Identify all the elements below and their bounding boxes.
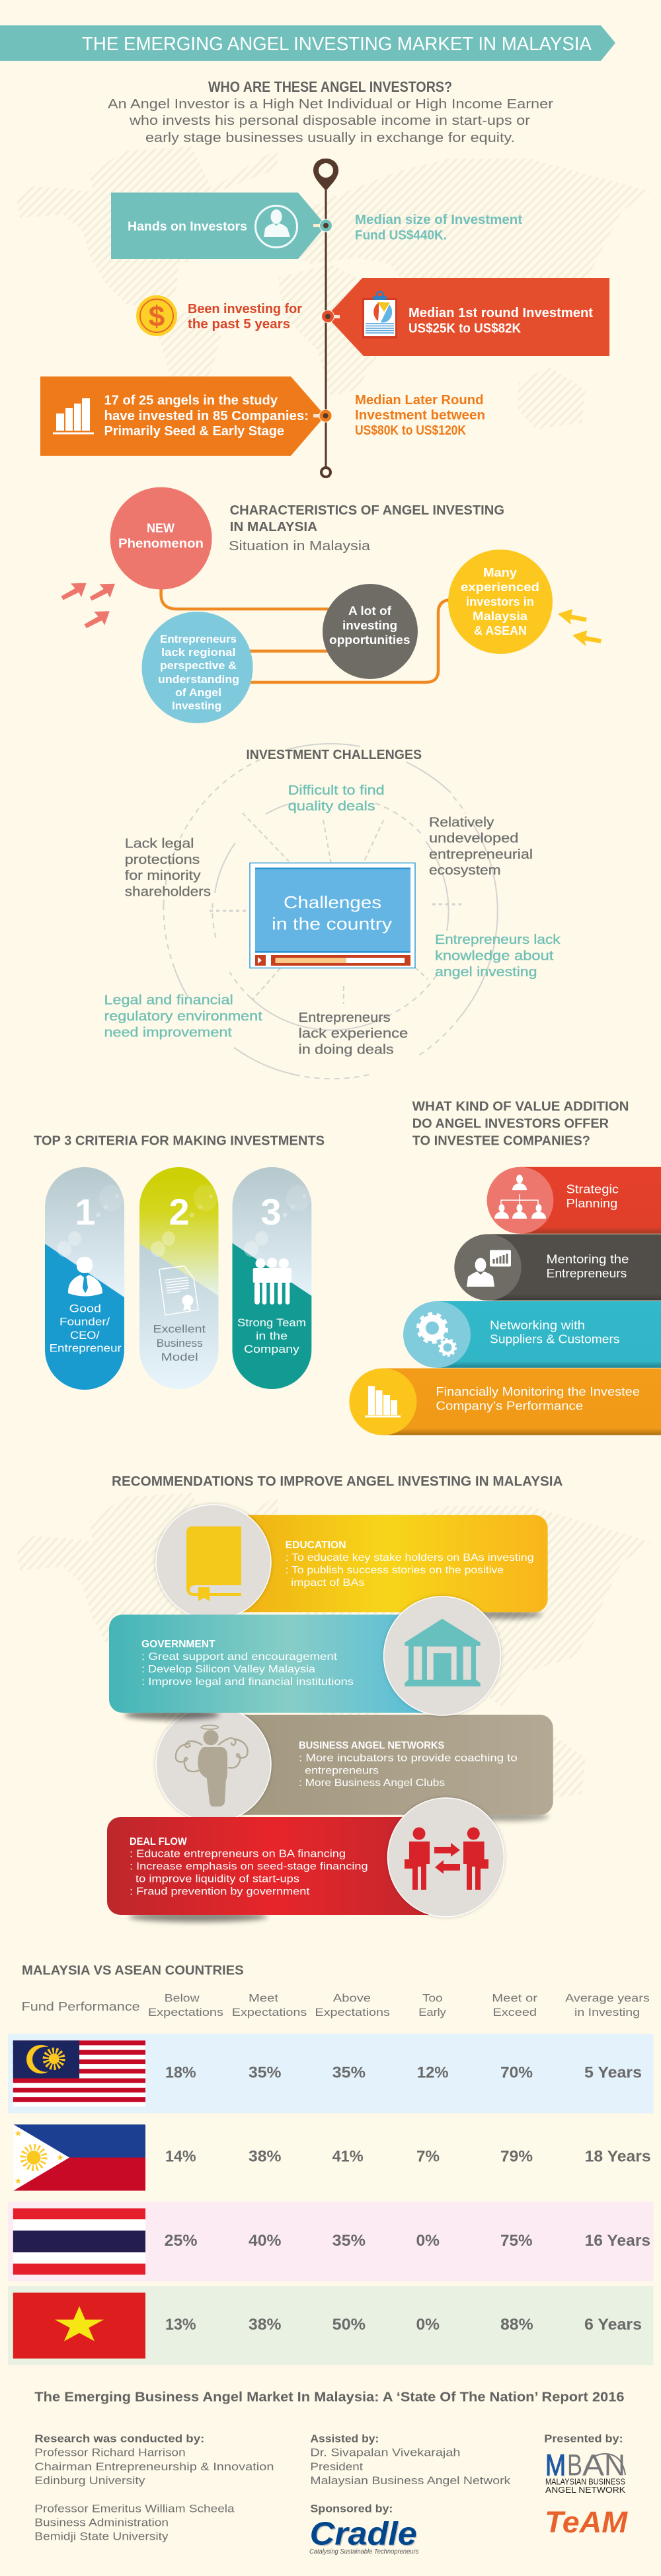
circle: many experienced investors: investors in <box>466 595 534 608</box>
challenge: undeveloped entrepreneurial ecosystem: Relatively <box>429 815 494 830</box>
pill 1: good founder <box>45 1167 124 1390</box>
row: philippines: 41% <box>332 2148 364 2166</box>
text: median later round: US$80K to US$120K <box>355 423 466 438</box>
text: been investing for 5 years <box>188 302 302 332</box>
circle: many experienced investors <box>448 550 553 654</box>
footer: presented by logos <box>544 2432 629 2539</box>
circle: new phenomenon: Phenomenon <box>118 537 204 551</box>
challenge: lack legal protections: for minority <box>125 869 201 883</box>
row: vietnam: 38% <box>249 2316 281 2334</box>
challenge: lack legal protections: Lack legal <box>125 837 194 851</box>
text: median later round: Investment between <box>355 408 485 423</box>
row: malaysia: 35% <box>332 2064 366 2082</box>
investment challenges rings <box>163 744 498 1079</box>
recommendation: education: : To publish success stories on the positive <box>286 1565 504 1576</box>
table header: Expectations <box>232 2006 307 2019</box>
cylinder: strategic planning: Planning <box>566 1197 617 1210</box>
footer: research credits: Research was conducted by: <box>34 2432 204 2445</box>
row: vietnam: 0% <box>416 2316 440 2334</box>
challenge: entrepreneurs lack experience: Entrepreneurs <box>299 1011 391 1025</box>
row: vietnam: 6 Years <box>584 2316 642 2334</box>
circle: entrepreneurs lack regional perspective: Investing <box>172 699 221 712</box>
pill 3: strong team: 3 <box>260 1191 282 1233</box>
footer: sponsored by cradle: Cradle <box>310 2517 417 2552</box>
recommendation: business angel networks <box>156 1707 553 1822</box>
cylinder: strategic planning: Strategic <box>566 1183 619 1196</box>
title banner: THE EMERGING ANGEL INVESTING MARKET IN MALAYSIA <box>82 34 592 55</box>
video screen: challenges in the country: in the country <box>272 914 392 934</box>
pill 2: excellent business model <box>139 1167 218 1389</box>
icon: investor avatar <box>255 206 297 247</box>
text: been investing for 5 years: the past 5 years <box>188 317 290 332</box>
panel: 17 of 25 angels: 17 of 25 angels in the study <box>104 394 278 408</box>
row: vietnam: 88% <box>500 2316 533 2334</box>
pill 3: strong team <box>232 1167 311 1389</box>
footer: research credits: Professor Richard Harrison <box>34 2447 186 2459</box>
circle: many experienced investors: experienced <box>461 581 539 594</box>
row: malaysia: 5 Years <box>584 2064 642 2082</box>
recommendation: business angel networks: BUSINESS ANGEL NETWORKS <box>299 1740 445 1752</box>
table header: Meet <box>249 1991 278 2004</box>
panel: 17 of 25 angels: Primarily Seed & Early Stage <box>104 424 284 439</box>
recommendation: business angel networks: entrepreneurs <box>305 1766 379 1777</box>
arrows: pink pointing up right <box>61 583 115 628</box>
row: malaysia: 12% <box>417 2064 449 2082</box>
intro: who are these angel investors: early stage businesses usually in exchange for equity. <box>145 131 515 145</box>
intro: who are these angel investors: who invests his personal disposable income in start-ups or <box>129 114 530 128</box>
pill 3: strong team: Company <box>244 1343 299 1355</box>
recommendation: education: EDUCATION <box>286 1540 346 1551</box>
icon: bar chart <box>53 398 94 435</box>
pill 3: strong team: Strong Team <box>237 1316 306 1329</box>
recommendation: business angel networks: : More incubators to provide coaching to <box>299 1752 518 1764</box>
icon: gears <box>418 1314 456 1355</box>
heading: recommendations: RECOMMENDATIONS TO IMPROVE ANGEL INVESTING IN MALAYSIA <box>112 1474 563 1489</box>
circle: many experienced investors: Malaysia <box>473 610 528 623</box>
row: philippines: 18 Years <box>585 2148 651 2166</box>
video screen: challenges in the country: Challenges <box>284 892 381 912</box>
heading: value addition: TO INVESTEE COMPANIES? <box>412 1133 590 1148</box>
pill 1: good founder: CEO/ <box>70 1329 100 1342</box>
cylinder: mentoring the entrepreneurs: Entrepreneurs <box>546 1267 627 1280</box>
recommendation: education <box>156 1505 548 1620</box>
challenge: entrepreneurs lack knowledge: Entrepreneurs lack <box>435 933 561 947</box>
footer: research credits: Business Administration <box>34 2516 169 2528</box>
recommendation: deal flow: : Fraud prevention by government <box>130 1886 310 1898</box>
icon: clipboard with pie chart <box>362 292 397 338</box>
circle: a lot of investing opportunities: investing <box>342 619 397 632</box>
row: philippines: 79% <box>500 2148 533 2166</box>
footer: sponsored by cradle: Catalysing Sustainable Technopreneurs <box>309 2548 418 2556</box>
table header: Average years <box>565 1991 650 2004</box>
footer: presented by logos: N <box>604 2448 625 2482</box>
flag: malaysia <box>13 2040 145 2106</box>
panel: hands on investors <box>111 193 332 259</box>
heading: characteristics of angel investing: CHARACTERISTICS OF ANGEL INVESTING <box>230 503 504 518</box>
circle: new phenomenon: NEW <box>147 522 175 536</box>
challenge: undeveloped entrepreneurial ecosystem: entrepreneurial <box>429 847 533 862</box>
circle: a lot of investing opportunities: A lot of <box>348 604 392 618</box>
footer: research credits: Edinburg University <box>34 2474 145 2487</box>
circle: entrepreneurs lack regional perspective: understanding <box>158 673 239 686</box>
table header: Meet or <box>492 1991 537 2004</box>
recommendation: deal flow: to improve liquidity of start-ups <box>136 1873 299 1885</box>
icon: book <box>186 1526 241 1601</box>
footer: report title: The Emerging Business Angel Market In Malaysia: A ‘State Of The Nation’ Report 2016 <box>34 2390 624 2405</box>
cylinder: financially monitoring <box>349 1369 661 1435</box>
intro: who are these angel investors: WHO ARE THESE ANGEL INVESTORS? <box>208 79 452 95</box>
pill 1: good founder: 1 <box>75 1191 96 1233</box>
circle: entrepreneurs lack regional perspective <box>141 612 253 723</box>
recommendation: education: : To educate key stake holders on BAs investing <box>286 1552 534 1563</box>
recommendation: deal flow <box>107 1798 504 1922</box>
recommendation: government <box>109 1596 501 1720</box>
icon: org chart <box>494 1174 546 1219</box>
icon: descending bars <box>365 1386 401 1417</box>
row: thailand: 75% <box>500 2232 533 2250</box>
title banner <box>0 25 615 61</box>
row: vietnam <box>8 2286 653 2365</box>
table header: Expectations <box>315 2006 390 2019</box>
circle: new phenomenon <box>110 487 212 589</box>
table header <box>21 1991 650 2019</box>
challenge: legal and financial regulatory environment: regulatory environment <box>104 1009 262 1024</box>
challenge: undeveloped entrepreneurial ecosystem: ecosystem <box>429 863 501 878</box>
row: malaysia: 35% <box>249 2064 281 2082</box>
table header: Early <box>418 2006 446 2019</box>
recommendation: government: : Develop Silicon Valley Malaysia <box>141 1664 315 1675</box>
footer: research credits: Bemidji State University <box>34 2530 169 2543</box>
text: median later round <box>355 393 485 438</box>
cylinder: financially monitoring: Company's Performance <box>436 1399 583 1412</box>
icon: dollar coin <box>136 295 177 336</box>
intro: who are these angel investors: An Angel Investor is a High Net Individual or High Income Earner <box>108 97 553 112</box>
recommendation: government: : Improve legal and financial institutions <box>141 1676 354 1688</box>
footer: presented by logos: A <box>582 2448 604 2482</box>
footer: research credits: Chairman Entrepreneurship & Innovation <box>34 2460 274 2473</box>
icon: angel <box>176 1725 248 1807</box>
row: vietnam: 50% <box>332 2316 366 2334</box>
flag: vietnam <box>13 2293 145 2359</box>
circle: entrepreneurs lack regional perspective: lack regional <box>161 646 235 659</box>
cylinder: networking <box>403 1301 661 1368</box>
heading: investment challenges: INVESTMENT CHALLENGES <box>246 748 422 762</box>
text: median later round: Median Later Round <box>355 393 484 408</box>
row: philippines: 7% <box>416 2148 440 2166</box>
icon: dollar coin: $ <box>149 301 165 333</box>
heading: value addition: DO ANGEL INVESTORS OFFER <box>412 1116 609 1131</box>
circle: a lot of investing opportunities: opportunities <box>329 633 410 647</box>
row: philippines <box>8 2118 653 2198</box>
row: philippines: 38% <box>249 2148 281 2166</box>
cylinder: mentoring the entrepreneurs <box>454 1234 661 1301</box>
row: thailand: 35% <box>332 2232 366 2250</box>
heading: value addition: WHAT KIND OF VALUE ADDITION <box>412 1100 629 1114</box>
table header: Exceed <box>493 2006 537 2019</box>
challenge: legal and financial regulatory environment: need improvement <box>104 1025 232 1040</box>
recommendation: deal flow: : Increase emphasis on seed-stage financing <box>130 1861 368 1873</box>
row: thailand: 40% <box>249 2232 281 2250</box>
footer: sponsored by cradle <box>309 2502 418 2556</box>
challenge: entrepreneurs lack knowledge: angel investing <box>435 965 537 980</box>
panel: hands on investors: Hands on Investors <box>128 220 247 234</box>
panel: median first round investment <box>321 278 609 356</box>
panel: 17 of 25 angels <box>40 376 332 456</box>
pill 2: excellent business model: Business <box>157 1337 203 1349</box>
footer: assisted by: Malaysian Business Angel Network <box>310 2474 511 2487</box>
circle: many experienced investors: & ASEAN <box>474 624 527 637</box>
challenge: entrepreneurs lack experience: in doing deals <box>299 1042 394 1057</box>
heading: value addition <box>412 1100 629 1148</box>
row: malaysia: 70% <box>500 2064 533 2082</box>
pill 1: good founder: Entrepreneur <box>50 1342 122 1355</box>
recommendation: deal flow: DEAL FLOW <box>130 1836 188 1847</box>
row: thailand: 25% <box>165 2232 197 2250</box>
pill 3: strong team: in the <box>256 1330 288 1342</box>
challenge: entrepreneurs lack knowledge <box>435 933 561 980</box>
icon: bank building <box>405 1619 481 1686</box>
row: malaysia: 18% <box>165 2064 196 2082</box>
row: thailand <box>8 2202 653 2281</box>
footer: research credits: Professor Emeritus William Scheela <box>34 2502 235 2515</box>
recommendation: deal flow: : Educate entrepreneurs on BA financing <box>130 1848 346 1860</box>
circle: entrepreneurs lack regional perspective: perspective & <box>160 659 237 672</box>
footer: presented by logos: B <box>567 2448 582 2482</box>
flag: thailand <box>13 2208 145 2275</box>
footer: presented by logos: TeAM <box>545 2505 629 2539</box>
icon: mentor with chart <box>467 1250 511 1287</box>
footer: assisted by: President <box>310 2460 363 2473</box>
challenge: difficult to find quality deals: quality deals <box>288 799 375 814</box>
cylinder: financially monitoring: Financially Monitoring the Investee <box>436 1385 640 1398</box>
table header: Too <box>422 1991 443 2004</box>
footer: presented by logos: Presented by: <box>544 2432 623 2445</box>
text: been investing for 5 years: Been investing for <box>188 302 302 316</box>
heading: characteristics of angel investing: IN MALAYSIA <box>230 520 317 534</box>
table header: Expectations <box>148 2006 223 2019</box>
row: thailand: 16 Years <box>585 2232 650 2250</box>
challenge: difficult to find quality deals <box>288 783 385 814</box>
footer: research credits <box>34 2432 274 2543</box>
circle: entrepreneurs lack regional perspective: of Angel <box>175 686 221 699</box>
pill 2: excellent business model: 2 <box>169 1191 190 1233</box>
connectors between characteristic circles <box>161 588 449 682</box>
text: median size of investment: Fund US$440K. <box>355 229 447 243</box>
heading: characteristics of angel investing: Situation in Malaysia <box>229 539 371 554</box>
circle: entrepreneurs lack regional perspective: Entrepreneurs <box>160 633 237 645</box>
challenge: difficult to find quality deals: Difficult to find <box>288 783 385 798</box>
pill 1: good founder: Good <box>69 1303 101 1314</box>
heading: malaysia vs asean: MALAYSIA VS ASEAN COUNTRIES <box>22 1963 244 1978</box>
icon: two people exchanging <box>405 1827 488 1890</box>
footer: assisted by: Dr. Sivapalan Vivekarajah <box>310 2447 460 2459</box>
challenge: undeveloped entrepreneurial ecosystem <box>429 815 533 878</box>
pill 2: excellent business model: Excellent <box>153 1322 206 1336</box>
challenge: legal and financial regulatory environment <box>104 993 262 1040</box>
table header: Below <box>165 1991 200 2004</box>
video screen: challenges in the country <box>250 863 415 968</box>
cylinder: mentoring the entrepreneurs: Mentoring the <box>546 1252 629 1266</box>
recommendation: education: impact of BAs <box>291 1577 365 1589</box>
cylinder: networking: Networking with <box>490 1318 585 1332</box>
timeline with location pin <box>313 159 338 477</box>
cylinder: networking: Suppliers & Customers <box>490 1333 620 1346</box>
challenge: lack legal protections <box>125 837 211 899</box>
footer: assisted by <box>310 2432 511 2487</box>
recommendation: government: : Great support and encouragement <box>141 1651 338 1663</box>
row: vietnam: 13% <box>165 2316 196 2334</box>
challenge: undeveloped entrepreneurial ecosystem: undeveloped <box>429 832 518 846</box>
footer: sponsored by cradle: Cradle <box>311 2517 418 2553</box>
circle: many experienced investors: Many <box>483 566 517 579</box>
intro: who are these angel investors <box>108 79 553 145</box>
footer: presented by logos: ANGEL NETWORK <box>545 2485 625 2495</box>
challenge: entrepreneurs lack knowledge: knowledge about <box>435 949 554 964</box>
heading: characteristics of angel investing <box>229 503 504 554</box>
flag: philippines <box>13 2124 145 2191</box>
pill 1: good founder: Founder/ <box>59 1315 110 1328</box>
table header: in Investing <box>574 2006 640 2019</box>
panel: median first round investment: Median 1st round Investment <box>408 306 593 320</box>
challenge: entrepreneurs lack experience: lack experience <box>299 1026 408 1041</box>
footer: sponsored by cradle: Sponsored by: <box>310 2502 393 2515</box>
challenge: entrepreneurs lack experience <box>299 1011 408 1057</box>
panel: median first round investment: US$25K to US$82K <box>408 321 522 336</box>
pill 2: excellent business model: Model <box>161 1351 198 1363</box>
arrows: yellow pointing up left <box>558 609 602 646</box>
row: thailand: 0% <box>416 2232 440 2250</box>
cylinder: strategic planning <box>487 1167 661 1234</box>
recommendation: government: GOVERNMENT <box>141 1639 215 1650</box>
footer: presented by logos: MALAYSIAN BUSINESS <box>545 2477 625 2487</box>
icon: founder <box>68 1257 102 1296</box>
challenge: lack legal protections: protections <box>125 853 200 867</box>
text: median size of investment: Median size of Investment <box>355 213 522 227</box>
table header: Above <box>333 1991 371 2004</box>
footer: assisted by: Assisted by: <box>310 2432 379 2445</box>
challenge: lack legal protections: shareholders <box>125 884 211 899</box>
text: median size of investment <box>355 213 522 243</box>
icon: team <box>253 1258 292 1305</box>
recommendation: business angel networks: : More Business Angel Clubs <box>299 1777 445 1789</box>
icon: document with seal <box>159 1266 198 1315</box>
heading: top 3 criteria: TOP 3 CRITERIA FOR MAKING INVESTMENTS <box>34 1133 325 1148</box>
row: philippines: 14% <box>165 2148 196 2166</box>
panel: 17 of 25 angels: have invested in 85 Companies: <box>104 409 309 423</box>
row: malaysia <box>8 2034 653 2114</box>
table header: Fund Performance <box>21 2000 140 2013</box>
circle: a lot of investing opportunities <box>323 584 418 679</box>
footer: presented by logos: M <box>545 2448 566 2482</box>
challenge: legal and financial regulatory environment: Legal and financial <box>104 993 233 1008</box>
